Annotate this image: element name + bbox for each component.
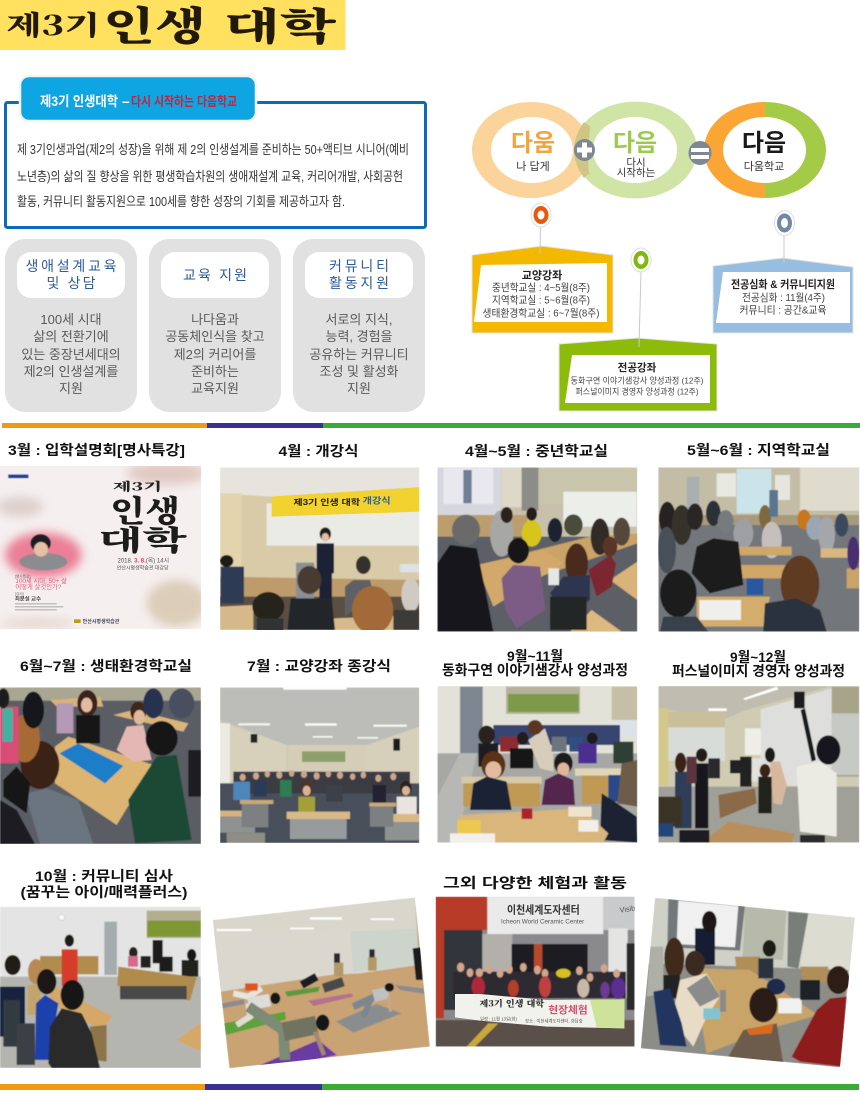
callout: 전공강좌: 전공강좌	[618, 362, 657, 374]
panel: community support card: 커뮤니티	[329, 258, 389, 274]
pin: slate	[774, 210, 794, 236]
panel: community support card: 활동지원	[329, 275, 389, 291]
ring: 나 답게: 나 답게	[516, 160, 550, 173]
caption: May to June: 5월~6월 : 지역학교실	[687, 442, 830, 458]
callout: 교양강좌: 교양강좌	[522, 269, 562, 282]
callout: 전공강좌: 동화구연 이야기샘강사 양성과정 (12주)	[570, 376, 704, 386]
ring: 다시 시작하는: 다시	[626, 157, 646, 169]
divider bar: bottom	[0, 1084, 859, 1090]
panel: life design education card: 지원	[59, 381, 83, 396]
caption: September to November	[442, 648, 628, 678]
ring: 나 답게: 다움	[511, 130, 555, 157]
intro body text: 노년층)의 삶의 질 향상을 위한 평생학습차원의 생애재설계 교육, 커리어개발, 사회공헌	[17, 169, 403, 184]
photo: group discussion	[641, 898, 855, 1067]
panel: life design education card	[5, 239, 137, 412]
ring: 다음학교	[704, 102, 826, 198]
caption: September to December: 퍼스널이미지 경영자 양성과정	[672, 663, 845, 679]
panel: education support card: 나다움과	[191, 312, 239, 327]
panel: community support card: 지원	[347, 381, 371, 396]
callout: 교양강좌: 중년학교실 : 4~5월(8주)	[492, 282, 590, 294]
photo: Icheon ceramic center field trip: 장소 : 이천세계도자센터, 화담숲	[525, 1018, 583, 1025]
photo: March poster: 어떻게 살것인가?	[15, 582, 62, 591]
ring: 다시 시작하는: 다음	[613, 130, 657, 157]
intro tab heading	[20, 76, 256, 121]
title banner: 제3기	[6, 4, 100, 43]
ring: 다음학교: 다움학교	[744, 160, 784, 173]
pin: orange	[531, 203, 551, 227]
photo: April opening ceremony	[220, 467, 420, 634]
caption: July: 7월 : 교양강좌 종강식	[247, 658, 391, 674]
intro body text: 활동, 커뮤니티 활동지원으로 100세를 향한 성장의 기회를 제공하고자 함.	[17, 194, 345, 209]
title banner	[0, 0, 346, 52]
photo: closing ceremony	[220, 687, 419, 843]
intro body text: 제 3기인생과업(제2의 성장)을 위해 제 2의 인생설계를 준비하는 50+액티브 시니어(예비	[17, 142, 409, 157]
icon: equals	[688, 141, 712, 165]
ring: 나 답게	[472, 102, 590, 198]
caption: March: 3월 : 입학설명회[명사특강]	[8, 442, 185, 458]
caption: April to May: 4월~5월 : 중년학교실	[465, 443, 608, 459]
panel: life design education card: 및 상담	[46, 275, 96, 291]
callout: 교양강좌: 지역학교실 : 5~6월(8주)	[492, 294, 590, 306]
icon: plus	[574, 139, 595, 161]
caption: June to July: 6월~7월 : 생태환경학교실	[20, 658, 192, 674]
caption: September to December: 9월~12월	[730, 649, 786, 665]
photo: regional classroom	[657, 467, 859, 632]
photo: ecology classroom	[0, 687, 201, 844]
panel: education support card	[149, 239, 281, 412]
intro body text	[17, 142, 409, 209]
panel: life design education card: 제2의 인생설계를	[24, 364, 118, 379]
photo: March poster: [명사특강]	[15, 573, 30, 578]
ring: 다시 시작하는	[574, 102, 697, 198]
photo: March poster: 안산시평생학습관	[83, 618, 120, 625]
caption: October	[20, 868, 188, 900]
photo: Icheon ceramic center field trip: 제3기 인생 대학	[479, 998, 545, 1010]
panel: education support card: 교육지원	[191, 381, 239, 396]
panel: community support card	[293, 239, 425, 412]
photo: Icheon ceramic center field trip: Icheon World Ceramic Center	[501, 918, 584, 925]
caption: September to November: 9월~11월	[507, 648, 563, 664]
photo: Icheon ceramic center field trip: 현장체험	[548, 1003, 588, 1016]
photo: March poster: 2018. 3. 8.(목) 14시	[118, 557, 169, 564]
pin: green	[631, 248, 651, 272]
panel: education support card: 공동체인식을 찾고	[165, 329, 265, 344]
panel: community support card: 능력, 경험을	[325, 329, 393, 344]
intro tab heading: –	[122, 94, 130, 109]
panel: life design education card: 생애설계교육	[26, 258, 117, 274]
photo: March poster: [강사]	[15, 591, 24, 596]
photo: mid-life classroom	[437, 467, 637, 632]
intro tab heading: 제3기 인생대학	[40, 94, 119, 109]
photo: personal image course	[658, 686, 859, 843]
photo: April opening ceremony: 개강식	[363, 495, 391, 506]
caption: September to November: 동화구연 이야기샘강사 양성과정	[442, 662, 628, 678]
ring: 다시 시작하는: 시작하는	[617, 166, 656, 179]
ring: 다음학교: 다음	[742, 130, 786, 157]
photo: Icheon ceramic center field trip: Visible	[619, 903, 642, 915]
panel: education support card: 교육 지원	[183, 267, 247, 283]
photo: April opening ceremony: 제3기 인생 대학	[293, 497, 361, 507]
panel: life design education card: 있는 중장년세대의	[21, 347, 121, 362]
photo: Icheon ceramic center field trip: 일정 : 11월 13일(화)	[480, 1016, 517, 1023]
photo: community review	[0, 907, 201, 1068]
photo: Icheon ceramic center field trip	[436, 897, 642, 1047]
callout: 교양강좌	[472, 203, 613, 333]
photo: March poster: 인생	[110, 487, 180, 531]
callout: 전공심화 & 커뮤니티지원: 전공심화 & 커뮤니티지원	[731, 277, 835, 291]
intro tab heading: 다시 시작하는 다음학교	[131, 94, 237, 109]
divider bar: top	[2, 423, 860, 428]
panel: community support card: 서로의 지식,	[325, 312, 393, 327]
panel: program intro	[6, 76, 426, 228]
caption: April: 4월 : 개강식	[278, 443, 358, 459]
callout: 전공강좌: 퍼스널이미지 경영자 양성과정 (12주)	[576, 386, 699, 396]
panel: education support card: 준비하는	[191, 364, 239, 379]
panel: community support card: 공유하는 커뮤니티	[309, 347, 409, 362]
photo: March poster: 대학	[98, 519, 188, 559]
callout: 전공심화 & 커뮤니티지원: 커뮤니티 : 공간&교육	[740, 304, 827, 316]
photo: floor exercise class	[213, 897, 430, 1068]
caption: September to December	[672, 649, 845, 679]
panel: life design education card: 100세 시대	[40, 312, 102, 327]
photo: March poster: 최문실 교수	[15, 595, 41, 603]
panel: community support card: 조성 및 활성화	[320, 364, 399, 379]
panel: life design education card: 삶의 전환기에	[33, 329, 109, 344]
photo: March poster	[0, 462, 207, 629]
caption: October: (꿈꾸는 아이/매력플러스)	[20, 884, 188, 900]
callout: 전공심화 & 커뮤니티지원	[713, 210, 853, 333]
photo: March poster: 제3기	[113, 479, 162, 495]
caption: October: 10월 : 커뮤니티 심사	[35, 868, 173, 884]
photo: March poster: 100세 시대, 50+ 삶	[15, 576, 67, 585]
callout: 전공심화 & 커뮤니티지원: 전공심화 : 11월(4주)	[742, 292, 825, 304]
photo: storytelling course	[437, 686, 637, 843]
callout: 교양강좌: 생태환경학교실 : 6~7월(8주)	[482, 306, 600, 320]
diagram: 다움 + 다음 = 다음학교	[472, 102, 826, 198]
panel: education support card: 제2의 커리어를	[174, 347, 256, 362]
callout: 전공강좌	[559, 248, 717, 411]
photo: March poster: 안산시평생학습관 대강당	[117, 565, 169, 572]
photo: Icheon ceramic center field trip: 이천세계도자센터	[507, 903, 580, 916]
caption: other activities: 그외 다양한 체험과 활동	[443, 875, 627, 891]
